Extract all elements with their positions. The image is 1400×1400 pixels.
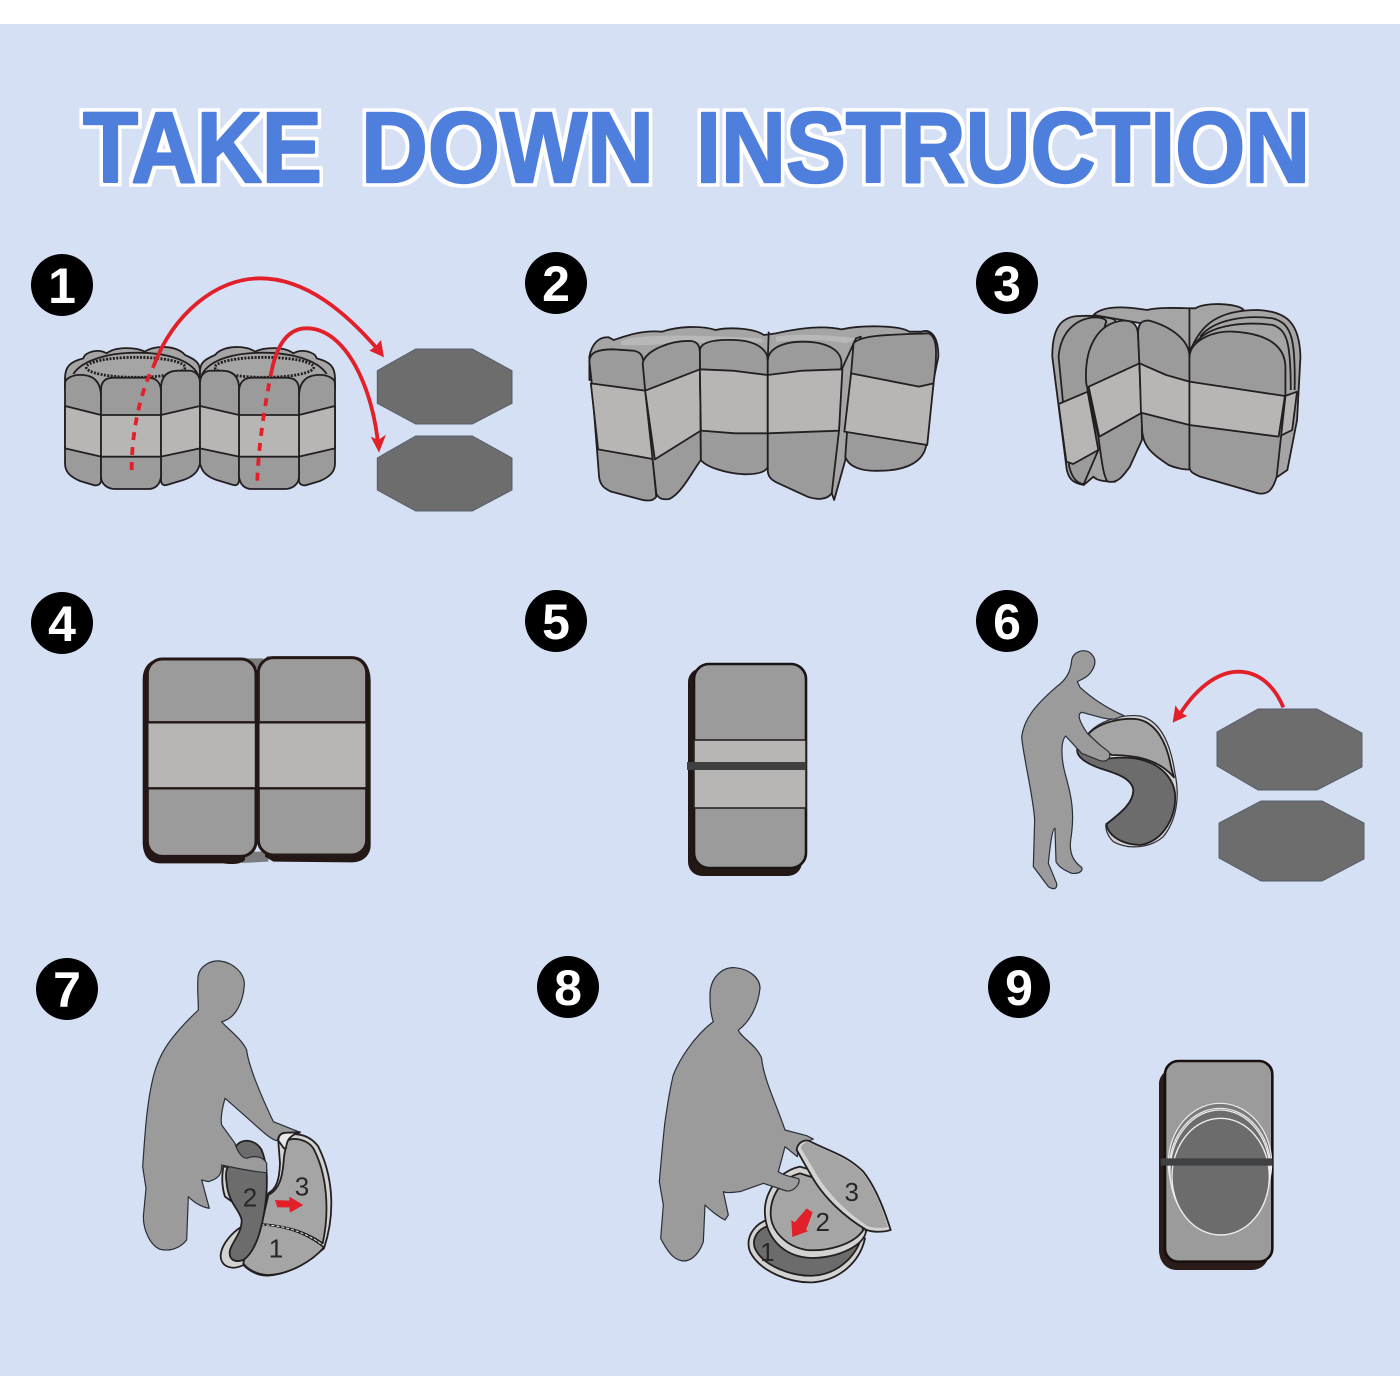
label 1: 1: [269, 1233, 283, 1263]
illustration: person twisting frame into coils: [143, 961, 331, 1276]
title: TAKE: [83, 92, 322, 204]
panel: step 7 twist frame: [36, 958, 331, 1276]
badge 9: 9: [1005, 960, 1033, 1016]
illustration: nearly folded tent: [1052, 304, 1300, 494]
panel: step 8 stack coils: [537, 956, 891, 1282]
label 3: 3: [844, 1177, 859, 1207]
panel: step 4 folded open pack: [31, 592, 371, 864]
illustration: two panels side by side: [143, 657, 371, 864]
panel: step 9 final folded pack: [988, 956, 1272, 1270]
badge 5: 5: [542, 594, 570, 650]
illustration: two tents with floors removed: [65, 278, 386, 489]
badge 8: 8: [554, 960, 582, 1016]
title: INSTRUCTION: [696, 92, 1310, 204]
badge 2: 2: [542, 256, 570, 312]
illustration: person holding twisted frame: [1022, 651, 1283, 889]
label 2: 2: [243, 1183, 257, 1213]
illustration: folded pack with strap: [687, 664, 806, 876]
panel: step 5 folded and strapped: [525, 590, 806, 876]
panel: step 6 put floors into tent: [976, 590, 1364, 889]
illustration: opened tent zigzag: [589, 326, 938, 501]
badge 5: [525, 590, 587, 652]
badge 8: [537, 956, 599, 1018]
floor panel bottom: [377, 436, 512, 511]
badge 4: 4: [48, 596, 76, 652]
badge 9: [988, 956, 1050, 1018]
badge 6: 6: [993, 594, 1021, 650]
badge 7: [36, 958, 98, 1020]
arrow: second floor: [257, 328, 386, 481]
badge 3: 3: [993, 256, 1021, 312]
title: DOWN: [361, 92, 654, 204]
label 3: 3: [295, 1171, 309, 1201]
illustration: pack with coils and strap: [1159, 1061, 1272, 1270]
arrow: twist right: [275, 1197, 303, 1213]
arrow: down left: [791, 1208, 813, 1237]
illustration: person stacking three coils: [659, 968, 891, 1282]
badge 1: 1: [48, 258, 76, 314]
badge 6: [976, 590, 1038, 652]
floor panel top: [1217, 709, 1362, 790]
label 2: 2: [815, 1207, 830, 1237]
panel: step 2 fold tent flat: [525, 252, 938, 501]
badge 1: [31, 254, 93, 316]
panel: step 3 continue folding: [976, 252, 1300, 494]
title: [83, 92, 1310, 204]
label 1: 1: [760, 1237, 775, 1267]
arrow: floor into tent: [1173, 672, 1283, 723]
arrow: first floor: [132, 278, 384, 470]
panel: step 1 remove the two floors: [31, 254, 512, 511]
floor panel bottom: [1219, 801, 1364, 881]
badge 2: [525, 252, 587, 314]
floor panel top: [377, 349, 512, 424]
badge 4: [31, 592, 93, 654]
badge 3: [976, 252, 1038, 314]
badge 7: 7: [53, 962, 81, 1018]
